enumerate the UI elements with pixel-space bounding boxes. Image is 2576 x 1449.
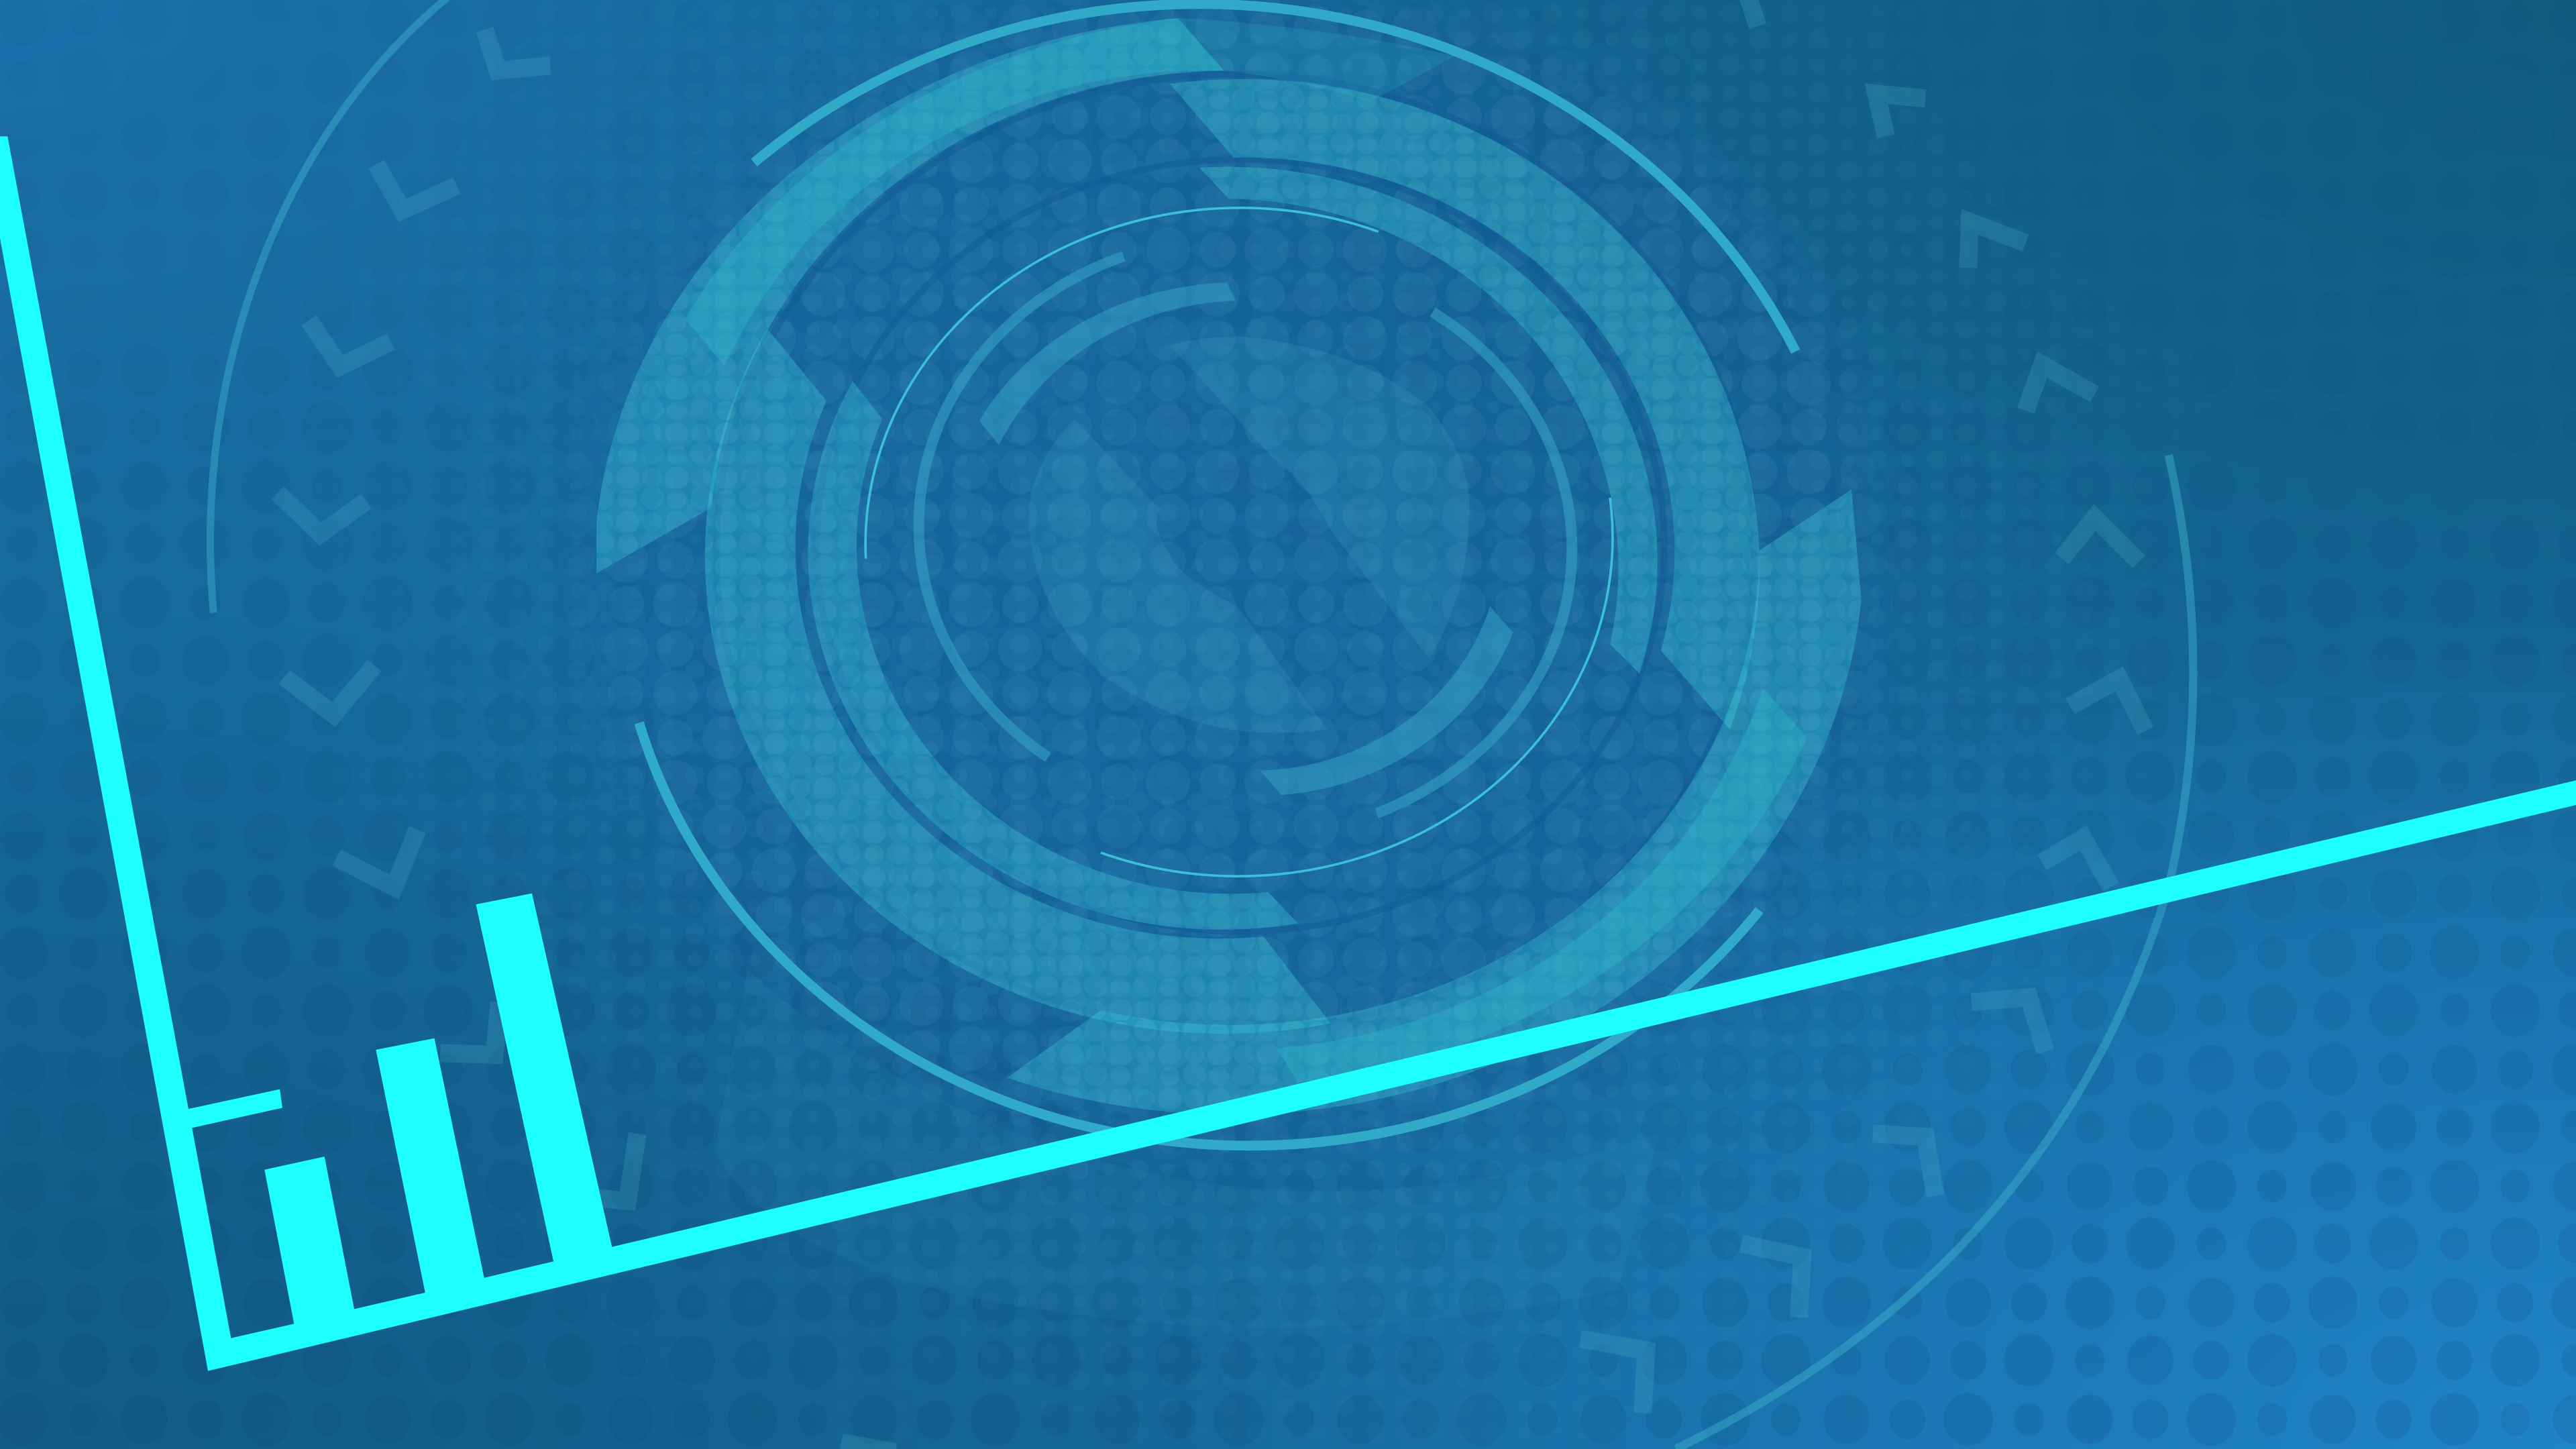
chevron 8 xyxy=(559,1134,637,1201)
chevron 17 xyxy=(1873,1134,1935,1196)
inner arc: upper left thin xyxy=(919,256,1124,757)
blob: left piece xyxy=(1028,419,1328,733)
band: inner right xyxy=(1199,167,1658,674)
chevron 11 xyxy=(1968,222,2026,268)
chevron 5 xyxy=(284,665,374,714)
band: inner left xyxy=(808,381,1298,930)
chevron 15 xyxy=(2042,838,2111,887)
faint lower swirl xyxy=(714,969,1659,1327)
chevron 2 xyxy=(376,164,457,210)
inner arc: upper thick xyxy=(979,282,1236,445)
chevron 13 xyxy=(2061,517,2139,562)
chevron 19 xyxy=(1580,1339,1646,1413)
band: top-left bright overlay xyxy=(685,18,1224,366)
chevron 6 xyxy=(337,830,417,887)
top arc xyxy=(754,4,1796,352)
band: top-left outer xyxy=(596,18,1224,574)
large thin arc: left xyxy=(211,0,449,612)
chevron 3 xyxy=(309,321,391,366)
inner arc: right thin xyxy=(1377,312,1572,813)
central light dot disc xyxy=(759,21,1843,1081)
chevron 7 xyxy=(440,1002,499,1055)
band: right-bottom bright overlay xyxy=(1277,688,1807,1083)
blob: right piece xyxy=(1170,337,1470,659)
halftone dot pattern xyxy=(1426,1020,2576,1446)
chevron 14 xyxy=(2070,678,2145,731)
centre blob shapes xyxy=(1028,337,1470,733)
chevron 10 xyxy=(1876,94,1925,136)
chevron 18 xyxy=(1741,1244,1803,1318)
spiral bands xyxy=(596,18,1862,1115)
chevron 16 xyxy=(1972,998,2045,1051)
chevron 12 xyxy=(2026,365,2094,411)
band: top-right xyxy=(1170,79,1760,729)
large thin arc: right xyxy=(1676,455,2193,1449)
inner arc: lower thick xyxy=(1260,606,1513,795)
band: left middle xyxy=(705,329,1331,1034)
chevron 20 xyxy=(841,1442,896,1449)
chevron 1 xyxy=(484,30,550,70)
chevron 4 xyxy=(278,493,366,534)
inner arcs xyxy=(919,256,1572,813)
chevrons ring xyxy=(278,0,2145,1449)
dark guide rings xyxy=(716,74,1755,1030)
thin ring arcs xyxy=(865,208,1613,876)
bottom arc xyxy=(639,723,1760,1146)
chevron 9 xyxy=(1748,0,1758,26)
band: top extension xyxy=(1178,18,1456,102)
band: right to bottom xyxy=(1007,490,1862,1115)
